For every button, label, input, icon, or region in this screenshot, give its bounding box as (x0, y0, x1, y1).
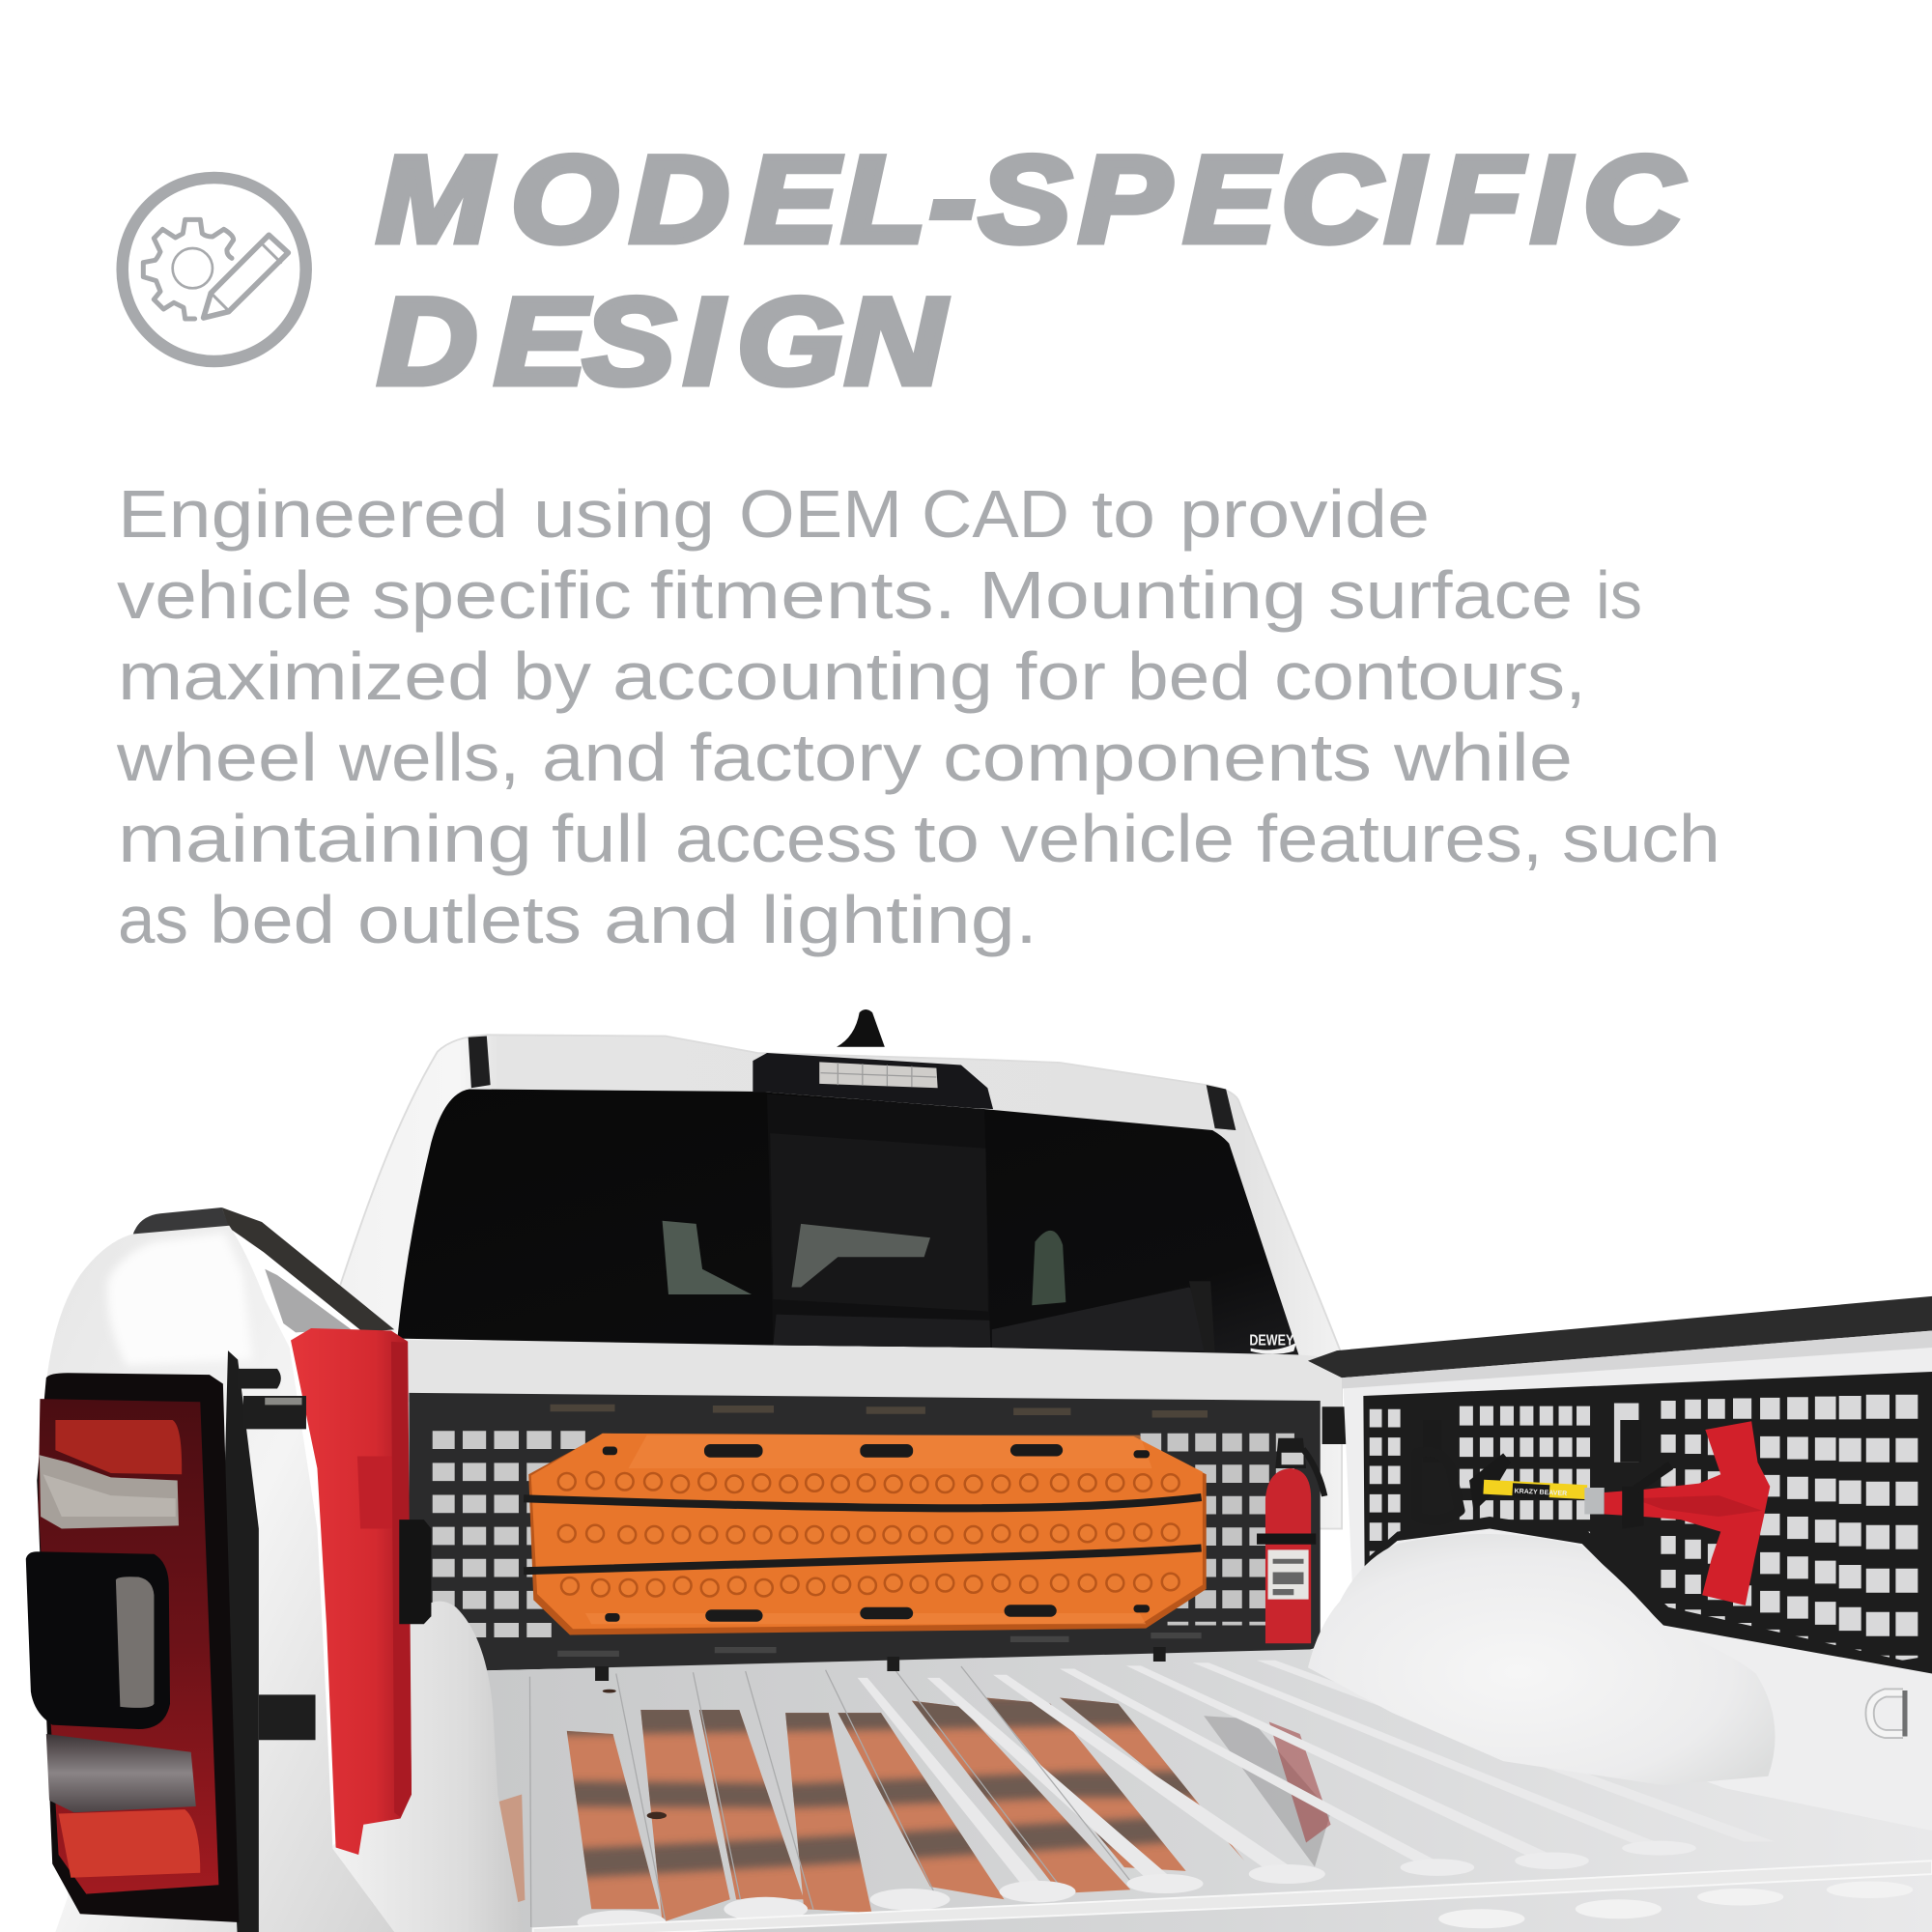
third brake light (753, 1053, 993, 1109)
body text (116, 476, 1720, 957)
floor rib ends (578, 1841, 1696, 1932)
body text: surface (1328, 557, 1573, 633)
body text: Engineered (118, 476, 508, 552)
body text: components (943, 720, 1372, 795)
bed rail (1308, 1296, 1932, 1378)
taillight (26, 1373, 239, 1922)
body text: and (604, 882, 739, 957)
body text: while (1393, 720, 1573, 795)
MOLLE panel: front bed wall (409, 1393, 1350, 1670)
body text: access (675, 801, 897, 876)
icon: gear and pencil in circle (123, 178, 306, 361)
left bed side (329, 1602, 524, 1932)
left floor reflections (493, 1795, 525, 1909)
top cap (132, 1208, 229, 1236)
body text: is (1596, 557, 1642, 633)
grip handle (1417, 1452, 1460, 1520)
body text: factory (690, 720, 922, 795)
bed floor (487, 1647, 1932, 1932)
body text: features, (1257, 801, 1543, 876)
right bed wall (1308, 1296, 1932, 1831)
body text: maximized (118, 639, 491, 714)
body text: and (542, 720, 668, 795)
body text: maintaining (118, 801, 532, 876)
body text: to (1092, 476, 1155, 552)
body text: provide (1179, 476, 1430, 552)
body text: contours, (1274, 639, 1586, 714)
floor grooves (529, 1666, 1133, 1927)
knob (399, 1520, 431, 1624)
red fuel can (291, 1328, 412, 1855)
panel feet (595, 1647, 1166, 1681)
body text: Mounting (979, 557, 1307, 633)
body text: bed (1127, 639, 1251, 714)
body text: lighting. (761, 882, 1037, 957)
body text: vehicle (117, 557, 353, 633)
body text: outlets (357, 882, 582, 957)
body text: such (1562, 801, 1720, 876)
orange recovery boards (524, 1434, 1207, 1634)
pillar trims (469, 1036, 1236, 1130)
body text: vehicle (1001, 801, 1235, 876)
wheel well (1308, 1534, 1776, 1785)
lower rib ends (1438, 1882, 1913, 1928)
T-handle tool: KRAZY BEAVER (1514, 1488, 1567, 1497)
body text: wheel (116, 720, 318, 795)
T-handle tool (1417, 1421, 1770, 1605)
body text: OEM (739, 476, 902, 552)
cross rail (533, 1861, 1932, 1932)
door body (46, 1226, 394, 1932)
antenna (837, 1009, 885, 1047)
body text: as (118, 882, 188, 957)
panel behind door (265, 1269, 352, 1332)
body text: using (533, 476, 715, 552)
body text: accounting (612, 639, 993, 714)
MOLLE panel: side wall (1363, 1372, 1932, 1673)
door edge (222, 1350, 259, 1932)
truck cab (337, 1009, 1342, 1528)
top rail (222, 1208, 394, 1332)
body text: for (1015, 639, 1106, 714)
rear window (397, 1090, 1298, 1354)
floor holes (603, 1690, 667, 1819)
title (377, 130, 1684, 410)
open tailgate side (26, 1208, 431, 1932)
floor reflection: orange boards (566, 1698, 1244, 1921)
photo: truck bed scene (26, 1009, 1932, 1932)
body text: bed (210, 882, 335, 957)
floor ribs (858, 1661, 1775, 1892)
title: MODEL-SPECIFIC (377, 130, 1684, 268)
hinge hardware (238, 1369, 316, 1740)
body text: full (552, 801, 650, 876)
body text: CAD (922, 476, 1069, 552)
body text: specific (372, 557, 632, 633)
fire extinguisher (1257, 1438, 1324, 1643)
logo: DEWEY: DEWEY (1249, 1333, 1294, 1349)
sill (397, 1340, 1342, 1420)
body text: wells, (338, 720, 520, 795)
title: DESIGN (378, 272, 947, 410)
floor reflection: extinguisher (1204, 1716, 1331, 1866)
body text: by (513, 639, 591, 714)
body text: to (914, 801, 980, 876)
logo: DEWEY (1249, 1333, 1296, 1354)
D-ring tie down (1870, 1690, 1905, 1737)
body text: fitments. (650, 557, 956, 633)
tie-down straps (524, 1497, 1202, 1571)
